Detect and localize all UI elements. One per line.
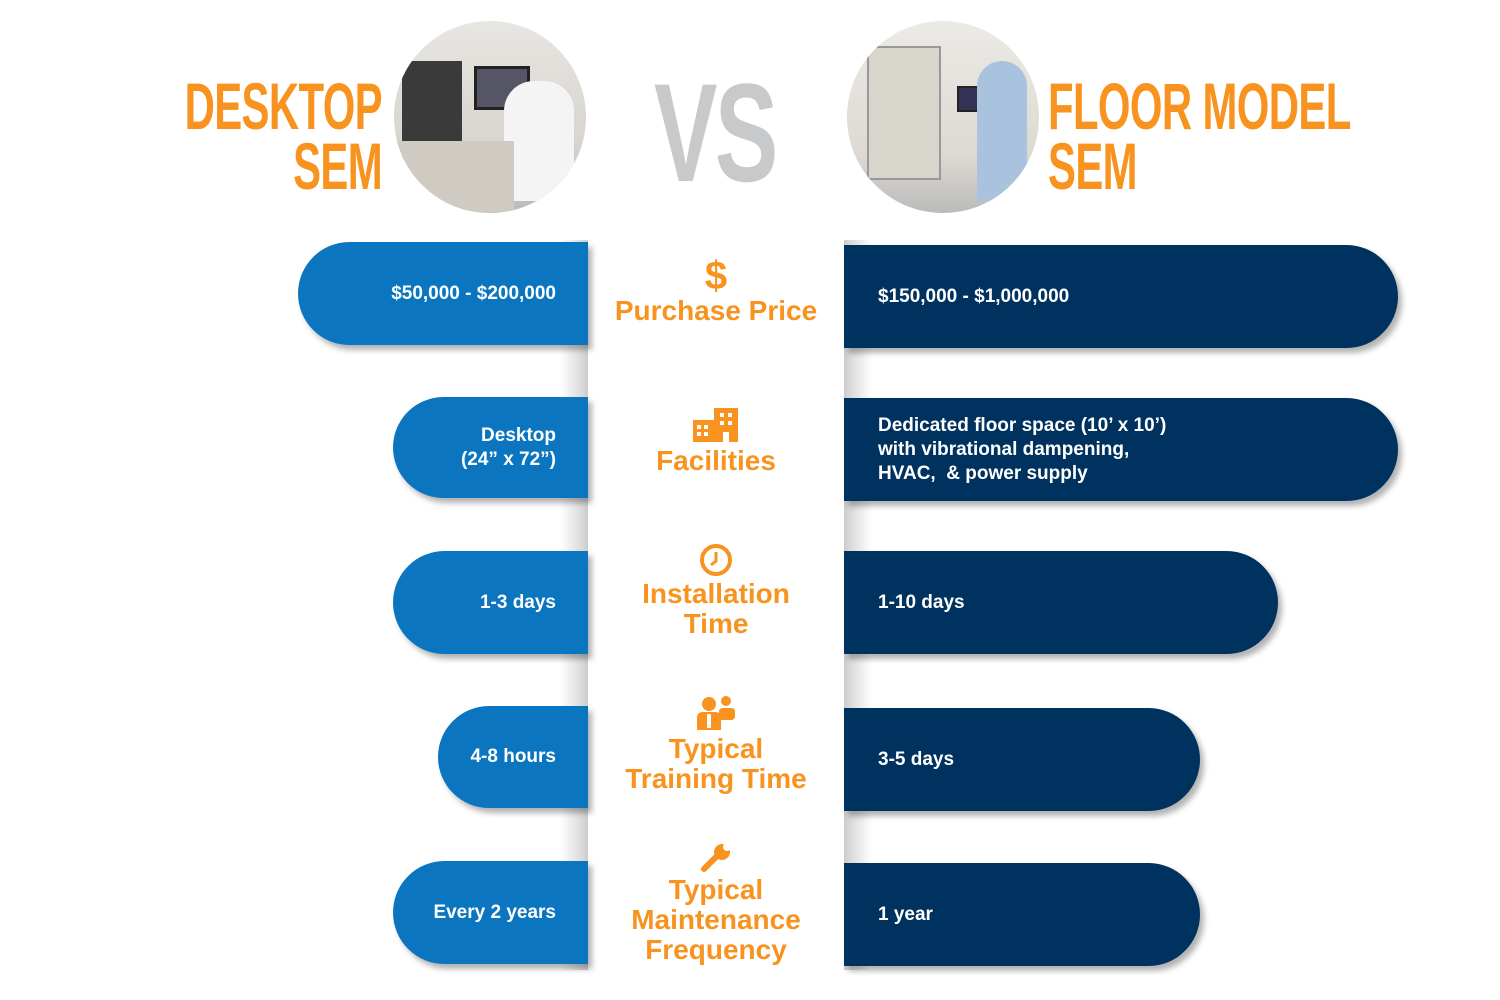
row 2 right: facilities: Dedicated floor space (10’ x 10’) — [878, 414, 1166, 436]
row 1 center: purchase price: Purchase Price — [615, 295, 817, 326]
row 3 center: installation time — [642, 544, 790, 639]
row 4 left: training — [438, 706, 588, 808]
row 4 right: training — [844, 708, 1200, 811]
row 2 center: facilities: Facilities — [656, 445, 776, 476]
VS: VS — [654, 54, 776, 211]
row 5 center: maintenance: Frequency — [645, 934, 787, 965]
row 1 right: price — [844, 245, 1398, 348]
title: desktop SEM — [185, 69, 382, 203]
row 3 left: install: 1-3 days — [480, 592, 556, 612]
title: desktop SEM: SEM — [293, 129, 382, 203]
row 2 left: facilities — [393, 397, 588, 498]
row 4 right: training: 3-5 days — [878, 748, 954, 770]
row 5 center: maintenance — [631, 844, 801, 965]
row 3 center: installation time: Installation — [642, 578, 790, 609]
row 2 left: facilities: (24” x 72”) — [461, 448, 556, 470]
row 5 right: maintenance — [844, 863, 1200, 966]
row 5 center: maintenance: Maintenance — [631, 904, 801, 935]
title: desktop SEM: DESKTOP — [185, 69, 382, 143]
row 2 right: facilities: with vibrational dampening, — [878, 438, 1129, 460]
title: floor model SEM: FLOOR MODEL — [1048, 69, 1351, 143]
row 1 right: price: $150,000 - $1,000,000 — [878, 286, 1069, 306]
row 4 center: training time: Training Time — [625, 763, 807, 794]
photo: floor model SEM — [847, 21, 1039, 213]
center column shadow — [560, 240, 872, 970]
row 2 left: facilities: Desktop — [481, 424, 556, 446]
title: floor model SEM — [1048, 69, 1351, 203]
row 4 center: training time: Typical — [669, 733, 763, 764]
row 1 center: purchase price: $ — [705, 254, 727, 298]
row 3 right: install — [844, 551, 1278, 654]
row 5 center: maintenance: Typical — [669, 874, 763, 905]
row 4 center: training time — [625, 696, 807, 794]
row 1 left: price: $50,000 - $200,000 — [391, 282, 556, 304]
row 5 left: maintenance — [393, 861, 588, 964]
row 2 center: facilities — [656, 408, 776, 476]
row 1 center: purchase price — [615, 254, 817, 326]
row 3 left: install — [393, 551, 588, 654]
photo: desktop SEM — [394, 21, 586, 213]
title: floor model SEM: SEM — [1048, 129, 1137, 203]
row 2 right: facilities: HVAC, & power supply — [878, 462, 1088, 484]
row 3 right: install: 1-10 days — [878, 592, 965, 612]
row 3 center: installation time: Time — [684, 608, 748, 639]
row 2 right: facilities — [844, 398, 1398, 501]
row 1 left: price — [298, 242, 588, 345]
row 4 left: training: 4-8 hours — [470, 746, 556, 767]
row 5 right: maintenance: 1 year — [878, 904, 933, 924]
row 5 left: maintenance: Every 2 years — [433, 902, 556, 922]
